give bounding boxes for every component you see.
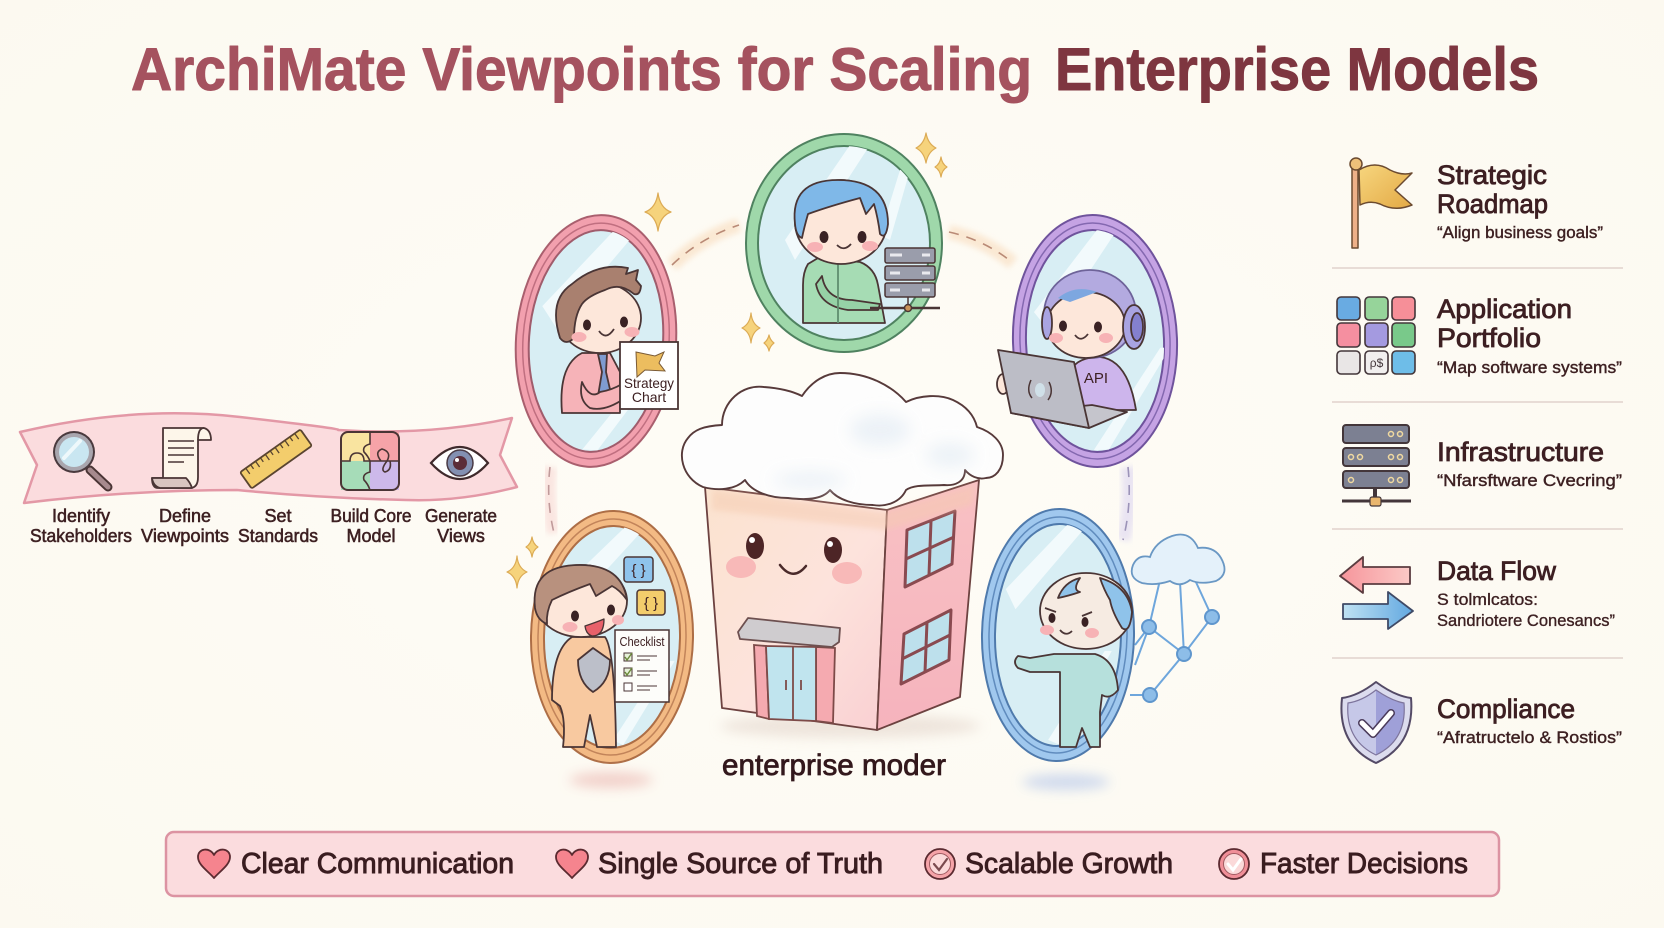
character (1042, 270, 1145, 410)
heading: Strategic (1437, 160, 1547, 190)
bar background (166, 832, 1499, 896)
icon: left arrow (1340, 557, 1410, 593)
heading: Infrastructure (1437, 437, 1604, 467)
speech bubbles (624, 557, 665, 615)
panel: orange mirror, compliance stakeholder (529, 510, 695, 764)
panel: green mirror, infrastructure stakeholder (746, 134, 942, 352)
panel: blue mirror, data flow stakeholder (980, 508, 1225, 762)
step labels: Build Core (330, 506, 412, 526)
icon: app grid: ρ$ (1370, 356, 1384, 370)
strategy chart sign: Chart (632, 389, 666, 405)
checklist (615, 630, 669, 702)
enterprise model label: enterprise moder (722, 749, 946, 782)
speech bubbles: { } (644, 595, 658, 612)
icon: server rack (1342, 425, 1411, 506)
title (131, 36, 1539, 103)
node network and cloud (1130, 534, 1225, 702)
side face (877, 480, 979, 730)
mirror frame (529, 510, 695, 764)
benefit: clear communication: Clear Communication (241, 848, 514, 880)
step labels: Model (346, 526, 396, 546)
icon: flag (1350, 158, 1412, 248)
quote: “Afratructelo & Rostios” (1437, 728, 1622, 747)
quote: “Map software systems” (1437, 358, 1622, 377)
heading (1437, 294, 1572, 353)
mirror ground shadow: blue (1022, 774, 1110, 790)
heading: Data Flow (1437, 556, 1556, 586)
mirror frame (746, 134, 942, 352)
step labels: Viewpoints (141, 526, 229, 546)
viewpoint: application portfolio (1337, 294, 1622, 377)
building shadow (720, 714, 980, 738)
sparkles (507, 133, 947, 588)
door (754, 645, 835, 723)
icon: check badge (925, 849, 955, 879)
character (795, 180, 888, 323)
benefit: faster decisions: Faster Decisions (1260, 848, 1468, 880)
strategy chart sign (620, 342, 678, 409)
character (535, 565, 627, 747)
step labels: Define (159, 506, 211, 526)
icon: right arrow (1343, 592, 1413, 629)
icon: scroll (152, 428, 211, 488)
icon: heart (556, 850, 588, 878)
icon: shield (1341, 682, 1411, 763)
icon: puzzle (341, 432, 399, 490)
icon: magnifying glass (53, 431, 108, 487)
server held by character (870, 248, 940, 312)
heading: Roadmap (1437, 189, 1548, 219)
heading: Portfolio (1437, 323, 1541, 353)
viewpoint: data flow (1340, 556, 1615, 630)
dashed connectors between mirrors (549, 225, 1129, 540)
icon: app grid (1337, 297, 1415, 374)
shadow under cloud (712, 485, 975, 530)
mirror frame (1009, 212, 1181, 470)
quote: Sandriotere Conesancs” (1437, 611, 1615, 630)
panel: purple mirror, application stakeholder (997, 212, 1181, 470)
icon: heart (198, 850, 230, 878)
building face (726, 533, 862, 584)
speech bubbles: { } (631, 562, 646, 579)
character (1015, 573, 1132, 747)
step labels: Standards (238, 526, 318, 546)
checklist: Checklist (620, 634, 665, 649)
step labels: Generate (425, 506, 497, 526)
viewpoint: strategic roadmap (1350, 158, 1603, 248)
step labels (30, 506, 497, 546)
icon: check badge (1219, 849, 1249, 879)
quote: “Nfarsftware Cvecring” (1437, 471, 1622, 490)
quote: S tolmlcatos: (1437, 590, 1538, 609)
character (556, 267, 641, 413)
panel: process ribbon (20, 413, 517, 546)
mirror frame (514, 214, 678, 468)
title: Enterprise Models (1055, 36, 1539, 103)
mirror frame (980, 508, 1136, 762)
step labels: Stakeholders (30, 526, 132, 546)
benefit: scalable growth: Scalable Growth (965, 848, 1173, 880)
strategy chart sign: Strategy (624, 375, 674, 391)
heading: Application (1437, 294, 1572, 324)
mirror ground shadow: orange (569, 772, 653, 788)
benefit: single source of truth: Single Source of Truth (598, 848, 883, 880)
icon: ruler (240, 429, 312, 489)
panel: viewpoint list (1332, 158, 1623, 763)
step labels: Identify (52, 506, 110, 526)
cloud roof (682, 373, 1003, 505)
upper window (905, 511, 955, 587)
viewpoint: compliance (1341, 682, 1622, 763)
title: ArchiMate Viewpoints for Scaling (131, 36, 1032, 103)
cloud shading (774, 414, 974, 488)
heading: Compliance (1437, 694, 1575, 724)
panel: benefits bar (166, 832, 1499, 896)
heading (1437, 160, 1548, 219)
step labels: Views (437, 526, 485, 546)
API label: API (1084, 370, 1108, 387)
icon: eye (431, 447, 488, 479)
front face (705, 487, 887, 730)
central enterprise building (682, 373, 1003, 782)
viewpoint: infrastructure (1342, 425, 1622, 506)
door awning (738, 618, 840, 647)
panel: pink mirror, strategy stakeholder (514, 214, 679, 468)
ribbon band (20, 413, 517, 503)
quote (1437, 590, 1615, 630)
step labels: Set (264, 506, 292, 526)
lower window (901, 610, 951, 684)
laptop (997, 350, 1127, 428)
quote: “Align business goals” (1437, 223, 1603, 242)
